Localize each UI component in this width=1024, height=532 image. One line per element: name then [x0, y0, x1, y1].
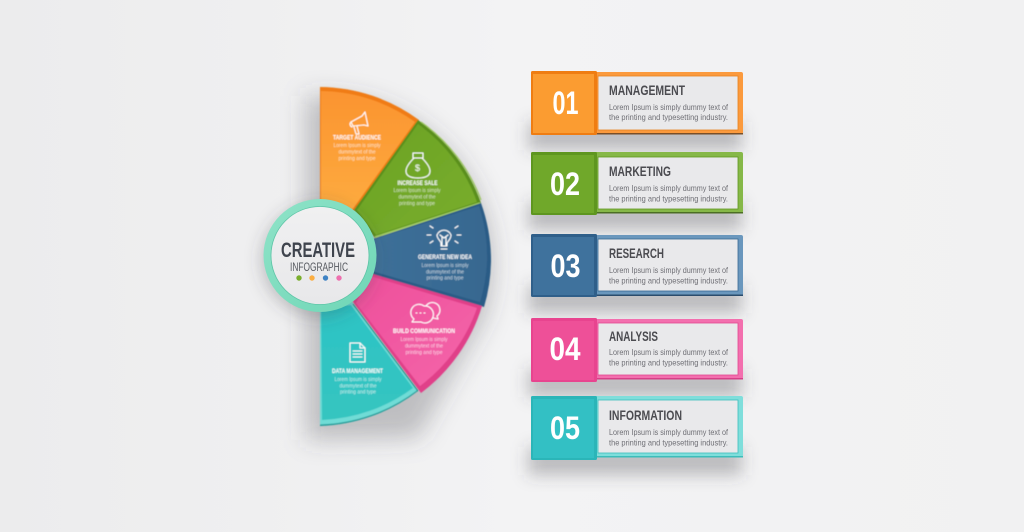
body text: the printing and typesetting industry.: [609, 276, 728, 286]
panel: fan chart: [320, 87, 491, 426]
segment: build communication: [353, 272, 482, 393]
body text: [609, 347, 729, 368]
body text: the printing and typesetting industry.: [609, 112, 728, 122]
text: data management body: Lorem Ipsum is simply: [334, 377, 382, 383]
text: build communication body: [400, 337, 448, 356]
text: generate new idea body: printing and type: [426, 276, 464, 282]
text: increase sale body: Lorem Ipsum is simply: [394, 188, 441, 194]
body text: Lorem Ipsum is simply dummy text of: [609, 347, 729, 357]
number: 01: [552, 85, 578, 121]
icon: document: [350, 343, 365, 362]
title: creative: CREATIVE: [281, 239, 355, 262]
card 01: management: [528, 71, 743, 150]
text: increase sale body: dummytext of the: [398, 194, 436, 200]
label: increase sale: INCREASE SALE: [398, 180, 438, 187]
card 03: research: [528, 234, 743, 313]
icon: speech bubbles: [411, 303, 440, 323]
card 05: information: [528, 396, 743, 475]
label: data management: DATA MANAGEMENT: [332, 368, 383, 375]
fan shadow: [306, 96, 494, 440]
heading: ANALYSIS: [609, 328, 658, 344]
text: data management body: [334, 377, 382, 396]
text: generate new idea body: dummytext of the: [426, 270, 464, 276]
body text: Lorem Ipsum is simply dummy text of: [609, 427, 729, 437]
text: generate new idea body: Lorem Ipsum is simply: [422, 263, 469, 269]
body text: [609, 427, 729, 448]
text: target audience body: [334, 143, 381, 162]
card 04: analysis: [528, 318, 743, 397]
body text: the printing and typesetting industry.: [609, 438, 728, 448]
number: 04: [550, 331, 581, 367]
number: 05: [550, 410, 580, 446]
legend dots: [296, 275, 342, 281]
segment: data management: [320, 302, 418, 426]
subtitle: infographic: INFOGRAPHIC: [290, 260, 348, 274]
text: data management body: printing and type: [340, 390, 376, 396]
icon text: dollar: $: [415, 163, 420, 173]
panel: center circle: [261, 199, 376, 317]
heading: RESEARCH: [609, 245, 664, 261]
body text: Lorem Ipsum is simply dummy text of: [609, 183, 729, 193]
heading: MANAGEMENT: [609, 82, 685, 98]
icon: light bulb: [427, 226, 461, 249]
text: target audience body: Lorem Ipsum is simply: [334, 143, 381, 149]
text: target audience body: dummytext of the: [338, 150, 376, 156]
body text: Lorem Ipsum is simply dummy text of: [609, 265, 729, 275]
heading: INFORMATION: [609, 407, 682, 423]
icon: money bag: [406, 153, 430, 178]
label: generate new idea: GENERATE NEW IDEA: [418, 254, 472, 261]
body text: the printing and typesetting industry.: [609, 194, 728, 204]
label: build communication: BUILD COMMUNICATION: [393, 328, 455, 335]
segment: generate new idea: [366, 203, 491, 307]
text: build communication body: dummytext of the: [405, 344, 443, 350]
text: target audience body: printing and type: [338, 156, 376, 162]
body text: [609, 265, 729, 286]
text: generate new idea body: [422, 263, 469, 282]
text: increase sale body: [394, 188, 441, 207]
text: build communication body: Lorem Ipsum is simply: [400, 337, 448, 343]
body text: [609, 102, 729, 122]
text: build communication body: printing and type: [406, 350, 442, 356]
number: 02: [550, 166, 580, 202]
body text: [609, 183, 729, 204]
body text: Lorem Ipsum is simply dummy text of: [609, 102, 729, 112]
number: 03: [550, 248, 580, 284]
body text: the printing and typesetting industry.: [609, 358, 728, 368]
heading: MARKETING: [609, 163, 671, 179]
segment: target audience: [320, 87, 419, 258]
text: data management body: dummytext of the: [340, 384, 376, 390]
label: target audience: TARGET AUDIENCE: [333, 134, 381, 142]
segment: increase sale: [354, 120, 481, 238]
text: increase sale body: printing and type: [399, 201, 435, 207]
icon: megaphone: [350, 112, 368, 134]
card 02: marketing: [528, 152, 743, 230]
